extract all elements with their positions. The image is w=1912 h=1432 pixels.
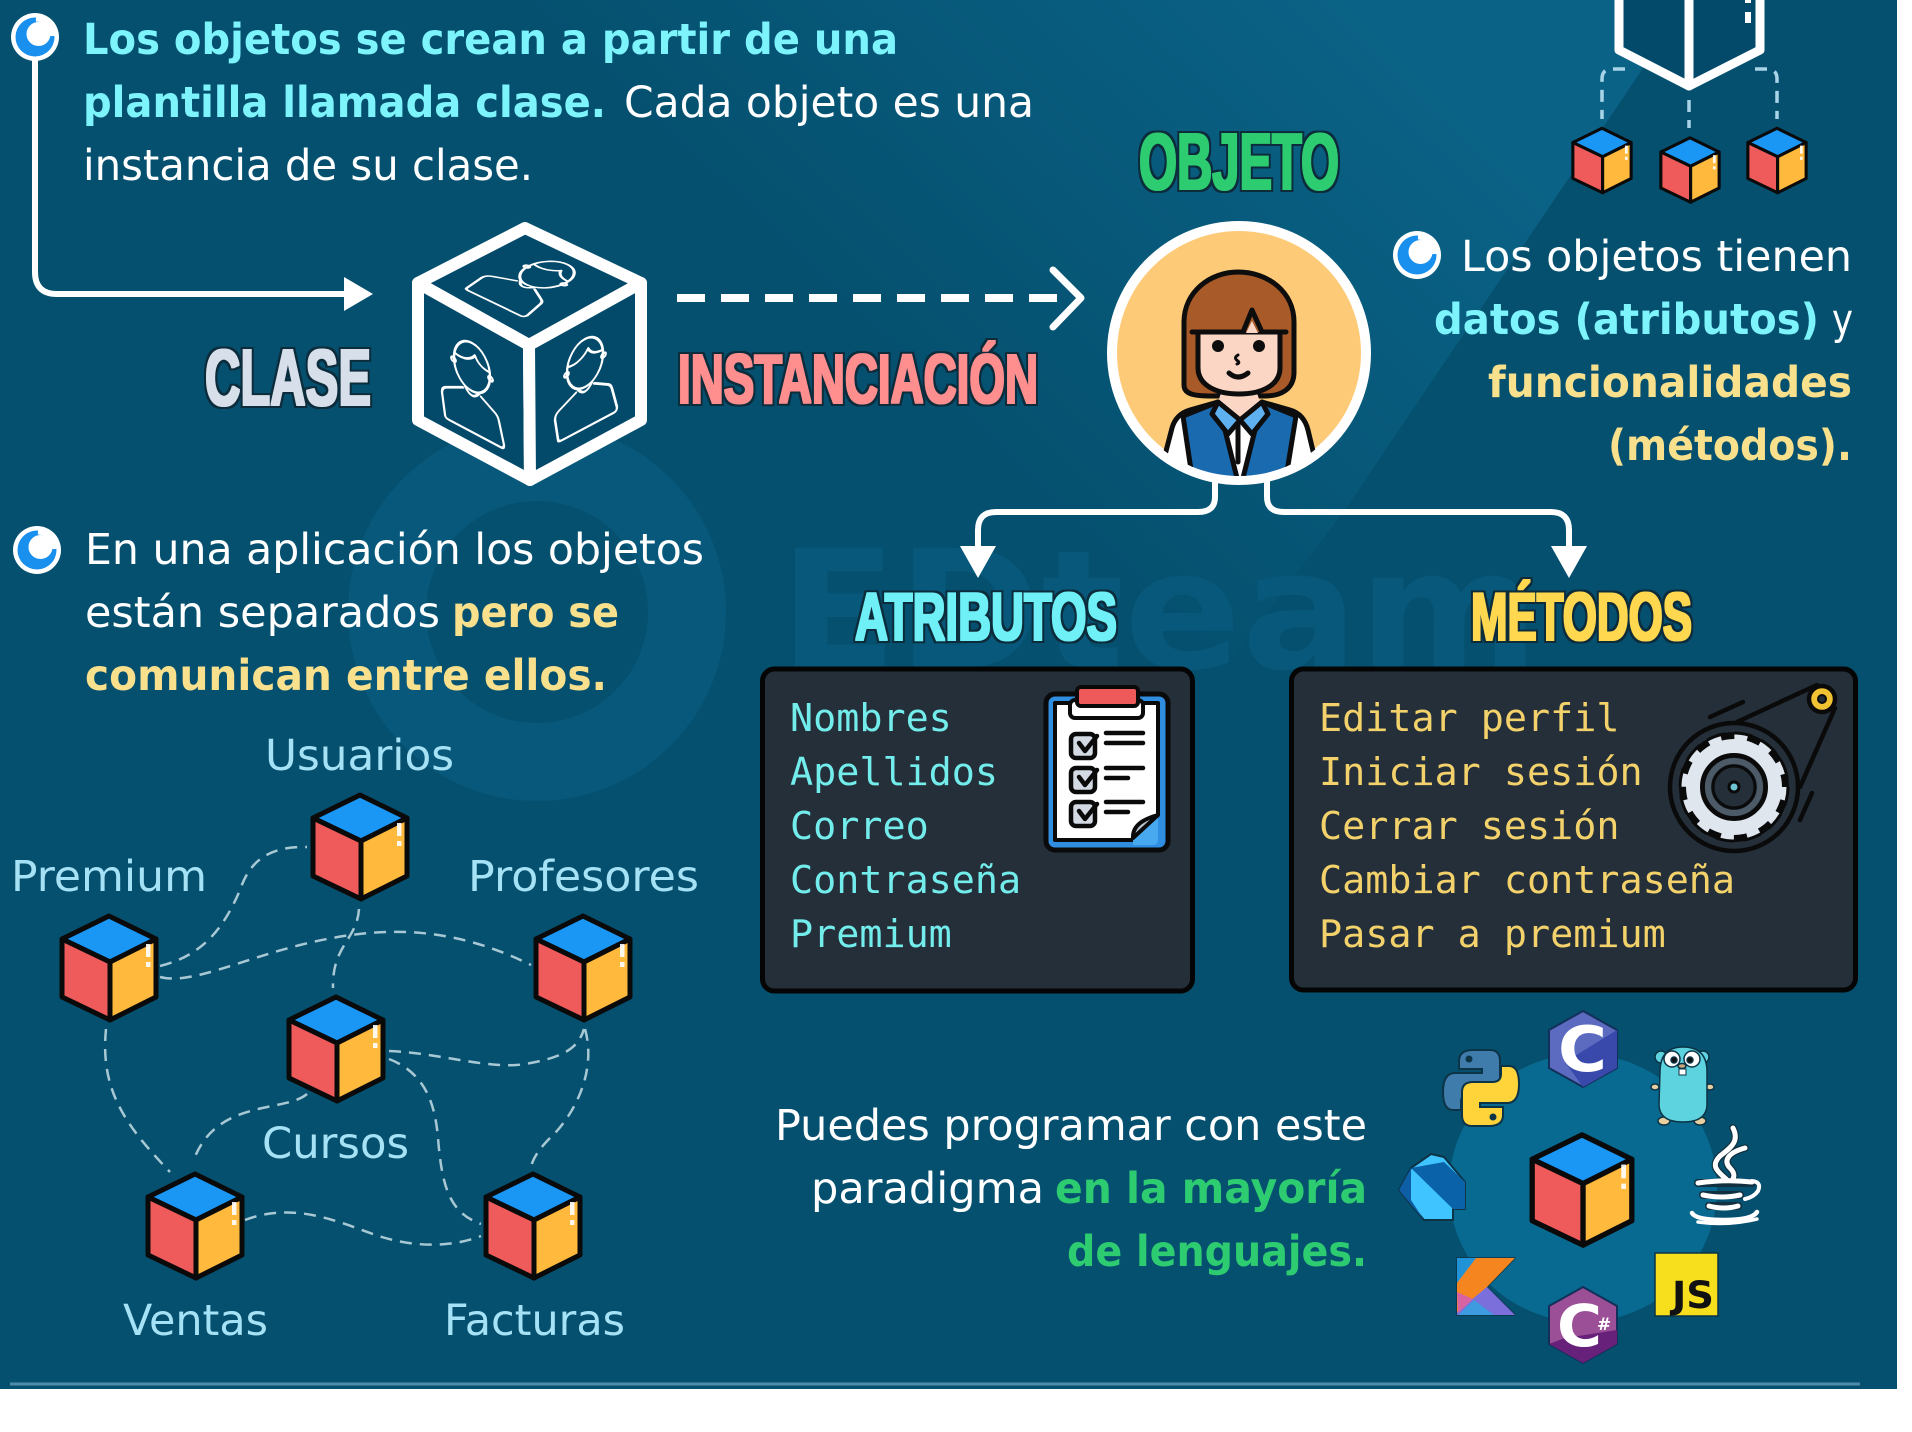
arrows from object to attributes and methods [960,480,1587,578]
icon: Dart [1399,1154,1465,1220]
node: Profesores [468,853,699,1020]
text block: objects have data and functionality: y [1832,296,1853,345]
node: Premium [11,853,207,1020]
text block: most languages support this paradigm: paradigma [811,1165,1044,1214]
node: Ventas [123,1174,268,1346]
icon: object person in circle [1112,226,1366,490]
node: Profesores: Profesores [468,853,699,902]
method list: Iniciar sesión [1319,750,1643,795]
icon: JavaScript [1655,1253,1718,1317]
icon: C sharp: C [1557,1292,1602,1360]
bottom divider rule [10,1382,1860,1386]
icon: C: C [1558,1013,1607,1086]
icon: Go gopher [1651,1047,1714,1125]
attribute list [790,696,1021,957]
text block: applications have separate objects: En una aplicación los objetos [85,526,704,575]
icon: central object cube [1532,1135,1632,1245]
icon: C sharp: # [1597,1315,1611,1335]
text block: objects are created from a class template [83,16,1034,191]
icon: Kotlin [1457,1258,1515,1315]
heading: CLASE: CLASE [205,333,371,422]
method list [1319,696,1735,957]
icon: C [1549,1011,1617,1087]
text block: objects have data and functionality [1393,231,1853,471]
method list: Cambiar contraseña [1319,858,1735,903]
dashed connections [105,847,588,1245]
icon: Java [1692,1128,1759,1223]
heading: MÉTODOS: MÉTODOS [1471,579,1692,655]
node: Usuarios: Usuarios [265,732,454,781]
icon: C sharp [1549,1287,1617,1363]
icon: class wireframe cube with people [418,228,641,480]
icon: cropped class cube with three instances [1573,0,1806,202]
attribute list: Contraseña [790,858,1021,903]
text block: objects are created from a class template: Los objetos se crean a partir de una [83,16,898,65]
node: Facturas: Facturas [444,1297,625,1346]
text block: objects are created from a class template: Cada objeto es una [624,79,1034,128]
bullet and arrow from text to class [11,13,373,311]
text block: objects are created from a class template: plantilla llamada clase. [83,79,606,128]
attribute list: Premium [790,912,952,957]
text block: most languages support this paradigm [775,1102,1367,1277]
node: Facturas [444,1174,625,1346]
icon: clipboard checklist [1046,687,1168,850]
language cluster [1399,1011,1759,1363]
dashed arrow: instantiation [677,270,1081,327]
text block: most languages support this paradigm: Puedes programar con este [775,1102,1367,1151]
text block: objects have data and functionality: datos (atributos) [1434,296,1819,345]
panel: methods [1292,669,1856,990]
node: Premium: Premium [11,853,207,902]
icon: Python [1443,1050,1519,1126]
text block: objects are created from a class template: instancia de su clase. [83,142,533,191]
text block: applications have separate objects [13,526,704,701]
icon: JavaScript: JS [1669,1274,1714,1317]
text block: objects have data and functionality: Los objetos tienen [1461,233,1852,282]
node: Usuarios [265,732,454,899]
background panel: EDteam [779,515,1539,707]
panel: attributes [762,669,1192,991]
text block: objects have data and functionality: funcionalidades [1488,359,1852,408]
heading: ATRIBUTOS: ATRIBUTOS [855,579,1117,655]
text block: objects have data and functionality: (métodos). [1608,422,1852,471]
attribute list: Nombres [790,696,952,741]
node: Ventas: Ventas [123,1297,268,1346]
text block: applications have separate objects: están separados [85,589,440,638]
method list: Pasar a premium [1319,912,1666,957]
attribute list: Apellidos [790,750,998,795]
method list: Editar perfil [1319,696,1619,741]
heading: OBJETO: OBJETO [1139,117,1339,206]
node: Cursos: Cursos [262,1120,409,1169]
node: Cursos [262,997,409,1169]
text block: applications have separate objects: comunican entre ellos. [85,652,607,701]
heading: INSTANCIACIÓN: INSTANCIACIÓN [678,340,1038,418]
method list: Cerrar sesión [1319,804,1619,849]
text block: applications have separate objects: pero se [452,589,619,638]
text block: most languages support this paradigm: en la mayoría [1055,1165,1367,1214]
attribute list: Correo [790,804,929,849]
icon: gear and belt [1670,685,1835,851]
text block: most languages support this paradigm: de lenguajes. [1067,1228,1367,1277]
network diagram: communicating objects [11,732,699,1346]
